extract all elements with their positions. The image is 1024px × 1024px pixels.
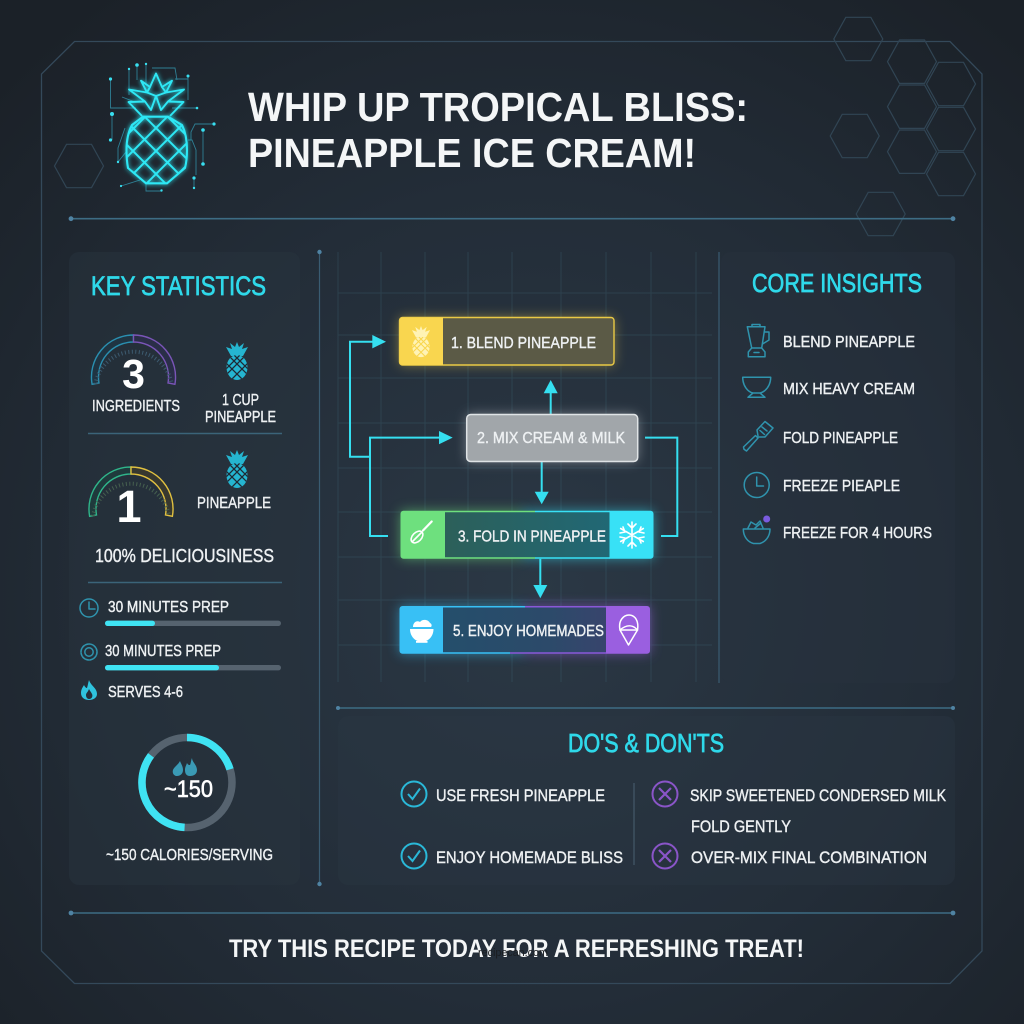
step 1: blend pineapple: 1. BLEND PINEAPPLE <box>451 335 596 352</box>
heading: core insights: CORE INSIGHTS <box>752 268 922 298</box>
item: fold pineapple <box>744 422 898 451</box>
gauge: 1: 1 <box>116 481 142 532</box>
gauge: 1 <box>89 467 173 532</box>
text: fold gently: FOLD GENTLY <box>691 817 791 836</box>
don't: skip sweetened condensed milk <box>652 782 947 806</box>
label: calories per serving: ~150 CALORIES/SERVING <box>106 847 273 864</box>
arrow: mix to freeze <box>645 438 677 536</box>
don't: over-mix <box>652 844 927 868</box>
gauge: 3 ingredients: 3 <box>122 351 145 397</box>
flowchart: recipe steps <box>350 318 677 654</box>
step 2: mix cream and milk <box>467 414 638 462</box>
icon: whisk <box>409 522 432 545</box>
don't: skip sweetened condensed milk: SKIP SWEETENED CONDERSED MILK <box>690 786 947 805</box>
do: enjoy homemade bliss: ENJOY HOMEMADE BLISS <box>436 848 623 867</box>
stat: serves with flame <box>81 680 183 701</box>
divider above do's and don'ts <box>336 706 955 710</box>
arrow: fold to enjoy <box>533 559 547 598</box>
label: 1 cup pineapple: 1 CUP <box>222 392 259 409</box>
icon: neon pineapple with circuit traces <box>108 62 216 192</box>
vertical divider right <box>718 252 720 683</box>
footer divider <box>69 911 955 915</box>
vertical divider left <box>317 250 322 886</box>
stat: prep time with gear: 30 MINUTES PREP <box>105 643 221 660</box>
heading: key statistics: KEY STATISTICS <box>91 271 266 301</box>
arrow: mix to fold <box>535 462 549 504</box>
arrow: loop back to blend <box>350 335 386 457</box>
stat: prep time with clock: 30 MINUTES PREP <box>108 599 229 616</box>
step 3: fold in pineapple: 3. FOLD IN PINEAPPLE <box>458 529 606 546</box>
call to action: TRY THIS RECIPE TODAY FOR A REFRESHING TREAT! <box>229 935 804 963</box>
title: PINEAPPLE ICE CREAM! <box>248 130 696 176</box>
icon: ice cream cone <box>620 615 638 645</box>
label: 1 cup pineapple <box>205 392 276 426</box>
do: enjoy homemade bliss <box>402 844 623 868</box>
heading: do's and don'ts: DO'S & DON'TS <box>568 728 724 758</box>
item: freeze pieaple: FREEZE PIEAPLE <box>783 478 900 495</box>
stat: prep time with gear <box>81 643 281 670</box>
item: blend pineapple: BLEND PINEAPPLE <box>783 334 915 351</box>
label: 1 cup pineapple: PINEAPPLE <box>205 409 276 426</box>
do: use fresh pineapple <box>402 782 605 806</box>
icon: pineapple <box>226 342 248 380</box>
step 5: enjoy homemades <box>400 606 650 654</box>
watermark: recipecan.com <box>478 947 548 959</box>
header divider <box>69 216 955 221</box>
step 1: blend pineapple <box>400 318 614 365</box>
title: WHIP UP TROPICAL BLISS: <box>248 84 748 130</box>
flowchart grid <box>338 252 712 682</box>
label: pineapple: PINEAPPLE <box>197 495 271 512</box>
do: use fresh pineapple: USE FRESH PINEAPPLE <box>436 786 605 805</box>
icon: bowl <box>410 620 434 643</box>
arrow: mix to blend <box>544 380 558 414</box>
decorative hexagons <box>54 17 976 236</box>
panel: key statistics <box>79 276 282 860</box>
item: mix heavy cream: MIX HEAVY CREAM <box>783 381 915 398</box>
item: blend pineapple <box>747 324 915 357</box>
gauge: 3 ingredients <box>91 335 180 415</box>
panel: do's and don'ts <box>338 716 955 885</box>
item: fold pineapple: FOLD PINEAPPLE <box>783 430 898 447</box>
step 2: mix cream and milk: 2. MIX CREAM & MILK <box>477 430 625 447</box>
icon: snowflake <box>620 522 644 548</box>
don't: over-mix: OVER-MIX FINAL COMBINATION <box>691 848 927 867</box>
donut chart: calories <box>142 738 232 828</box>
item: freeze for 4 hours: FREEZE FOR 4 HOURS <box>783 525 932 542</box>
step 5: enjoy homemades: 5. ENJOY HOMEMADES <box>453 623 604 640</box>
step 3: fold in pineapple <box>400 511 654 559</box>
gauge: 3 ingredients: INGREDIENTS <box>92 398 180 415</box>
item: freeze for 4 hours <box>743 516 932 544</box>
panel: core insights <box>721 252 955 683</box>
item: mix heavy cream <box>743 377 915 398</box>
icon: pineapple <box>226 450 248 488</box>
arrow: fold back to mix <box>370 431 453 536</box>
donut chart: calories: ~150 <box>164 776 213 803</box>
item: freeze pieaple <box>744 472 900 498</box>
stat: prep time with clock <box>80 599 281 626</box>
title <box>248 84 748 176</box>
stat: serves with flame: SERVES 4-6 <box>108 684 183 701</box>
label: 100% deliciousness: 100% DELICIOUSINESS <box>95 545 274 566</box>
